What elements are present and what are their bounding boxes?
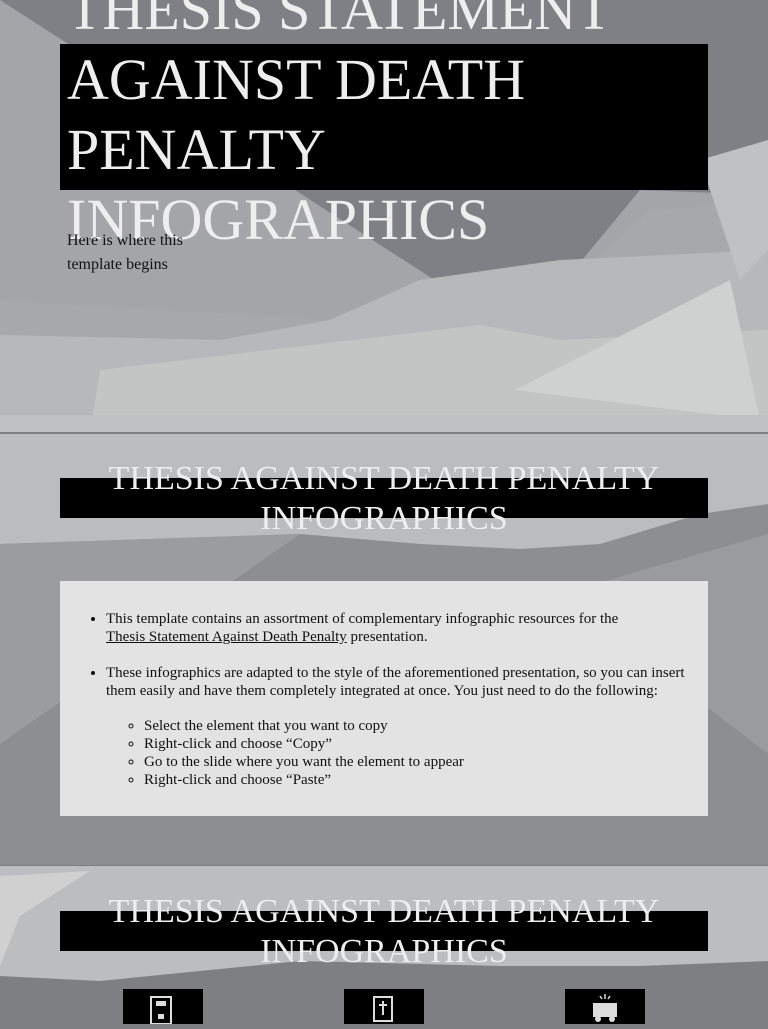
instructions panel: Right-click and choose “Paste” xyxy=(144,772,331,788)
slide 3 title text: INFOGRAPHICS xyxy=(260,933,508,970)
slide 3 title text: THESIS AGAINST DEATH PENALTY xyxy=(109,893,659,930)
slide 2 title text xyxy=(109,460,659,537)
title black box xyxy=(60,44,708,190)
title text: INFOGRAPHICS xyxy=(67,187,489,252)
title text: AGAINST DEATH xyxy=(67,47,525,112)
slide 2 background xyxy=(0,434,768,865)
instructions panel xyxy=(60,581,708,816)
slide 2 title text: THESIS AGAINST DEATH PENALTY xyxy=(109,460,659,497)
title text: PENALTY xyxy=(67,117,326,182)
instructions panel: Right-click and choose “Copy” xyxy=(144,736,332,752)
slide 3 title text xyxy=(109,893,659,970)
subtitle: Here is where this xyxy=(67,232,183,249)
slide 2 title text: INFOGRAPHICS xyxy=(260,500,508,537)
slide 2 title bar xyxy=(60,478,708,518)
instructions panel: Select the element that you want to copy xyxy=(144,718,388,734)
subtitle xyxy=(67,232,183,273)
instructions panel: This template contains an assortment of complementary infographic resources for the Thesis Statement Against Death Penalty presentation. xyxy=(106,611,618,645)
slide 3 background xyxy=(0,866,768,981)
icon: prison door xyxy=(123,989,203,1024)
icon: bible xyxy=(344,989,424,1024)
instructions panel: Go to the slide where you want the element to appear xyxy=(144,754,464,770)
title text xyxy=(67,0,612,252)
slide 1 background xyxy=(0,0,768,432)
slide 3 title bar xyxy=(60,911,708,951)
subtitle: template begins xyxy=(67,256,168,273)
instructions panel: These infographics are adapted to the style of the aforementioned presentation, so you can insert them easily and have them completely integrated at once. You just need to do the following: xyxy=(106,665,685,699)
icon: ambulance xyxy=(565,989,645,1024)
